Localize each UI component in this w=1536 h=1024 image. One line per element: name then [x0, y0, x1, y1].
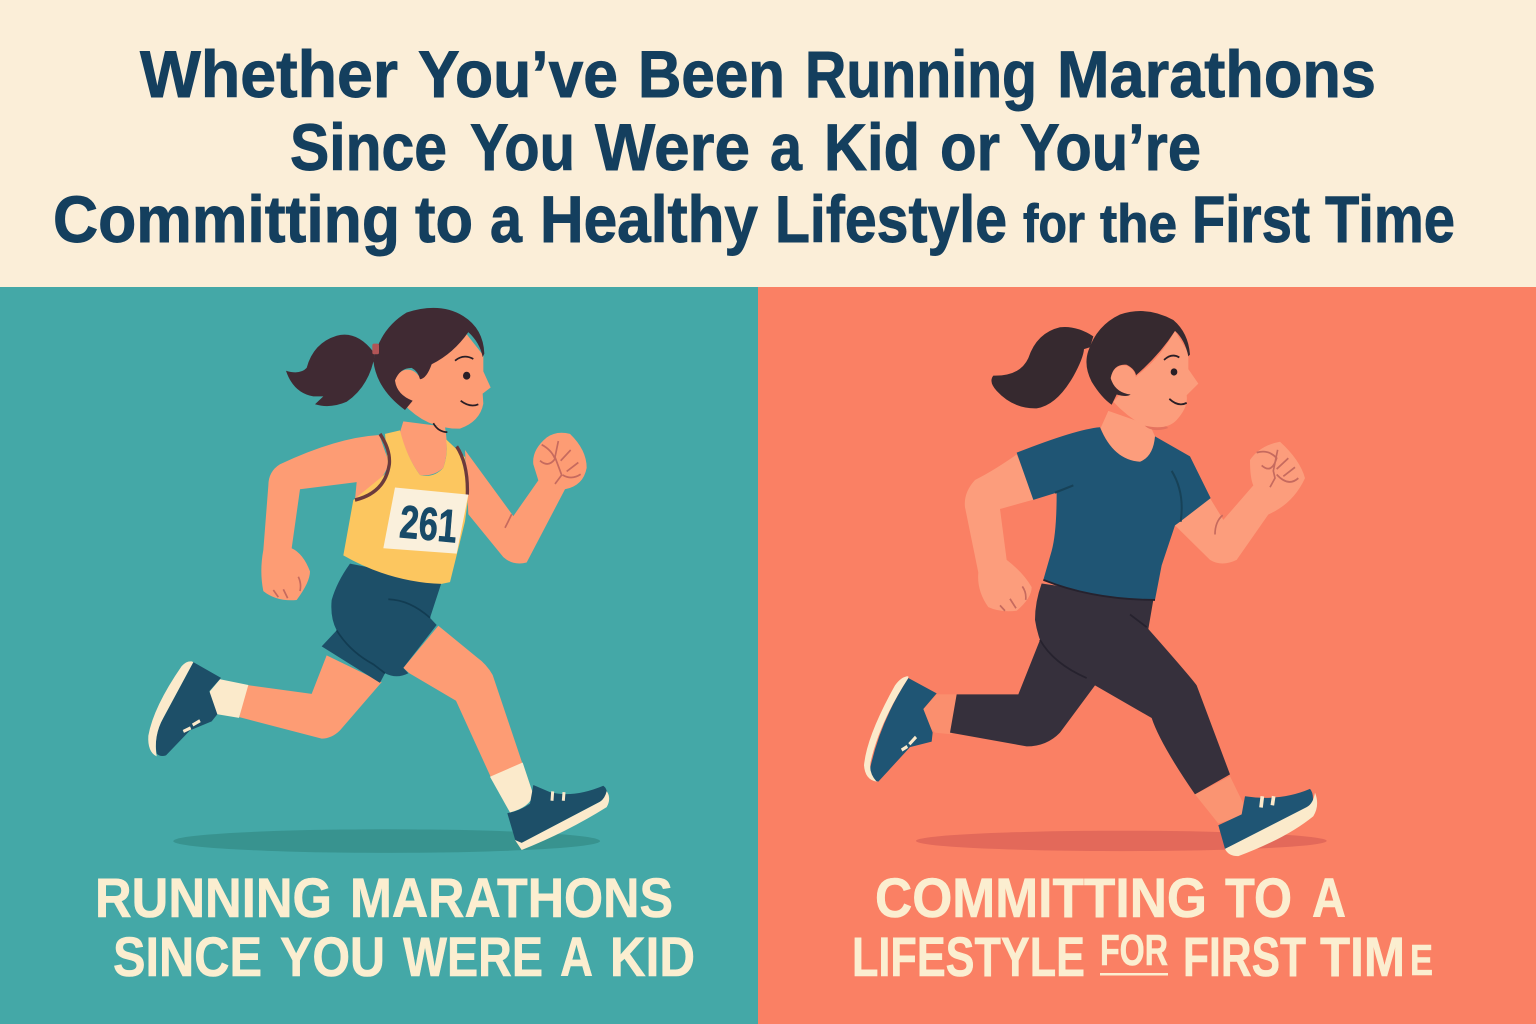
back leg: [239, 655, 382, 739]
front leg: [403, 626, 523, 777]
figure: young runner: [148, 308, 609, 853]
ground shadow: [916, 831, 1327, 851]
t-shirt: [1017, 427, 1211, 600]
label: committing to a lifestyle: FIRST: [1183, 925, 1306, 988]
tank top: [343, 430, 468, 584]
title: Whether: [140, 37, 398, 111]
title: Kid: [824, 110, 920, 184]
label: running marathons: YOU: [280, 925, 385, 988]
title: for: [1023, 194, 1085, 254]
title: Since: [290, 110, 447, 184]
front shin: [1195, 776, 1243, 823]
back arm: [965, 454, 1035, 611]
label: committing to a lifestyle: [852, 866, 1433, 988]
title: You’re: [1020, 110, 1201, 184]
title: You’ve: [418, 37, 618, 111]
front shoe: [1218, 789, 1317, 856]
title: to: [415, 182, 473, 256]
head: [372, 308, 491, 432]
header band: [0, 0, 1536, 287]
race bib: [383, 487, 468, 554]
front shoe: [507, 785, 609, 850]
figure: adult runner: [864, 311, 1327, 856]
title: Lifestyle: [775, 182, 1007, 256]
neck: [400, 421, 447, 475]
label: committing to a lifestyle: E: [1410, 936, 1433, 985]
race bib: 261: [398, 495, 459, 553]
label: committing to a lifestyle: TO: [1225, 866, 1292, 929]
label: committing to a lifestyle: FOR: [1100, 926, 1168, 975]
back shin: [923, 694, 957, 734]
leggings: [950, 584, 1230, 794]
ground shadow: [173, 829, 600, 853]
label: running marathons: [95, 866, 695, 988]
title: or: [940, 110, 1000, 184]
title: a: [490, 182, 523, 256]
title: You: [470, 110, 575, 184]
fist details: [273, 441, 581, 598]
title: Were: [595, 110, 750, 184]
title: a: [770, 110, 803, 184]
title: Been: [638, 37, 785, 111]
label: committing to a lifestyle: LIFESTYLE: [852, 925, 1085, 988]
title: the: [1100, 194, 1177, 254]
front arm: [465, 433, 587, 564]
label: committing to a lifestyle: TIM: [1320, 925, 1405, 988]
head: [1086, 311, 1198, 430]
fist details: [1000, 450, 1298, 611]
label: running marathons: MARATHONS: [350, 866, 673, 929]
back sock: [209, 679, 248, 718]
neck: [1101, 411, 1155, 462]
panel: running marathons since you were a kid: [0, 287, 758, 1024]
title: Committing: [53, 182, 400, 256]
label: running marathons: KID: [610, 925, 695, 988]
label: running marathons: A: [560, 925, 593, 988]
panel: committing to a lifestyle for the first time: [758, 287, 1536, 1024]
back arm: [261, 435, 388, 600]
label: running marathons: SINCE: [113, 925, 262, 988]
back shoe: [148, 661, 221, 756]
front sock: [490, 762, 533, 812]
ponytail: [991, 327, 1093, 408]
label: running marathons: RUNNING: [95, 866, 332, 929]
label: running marathons: WERE: [403, 925, 543, 988]
label: committing to a lifestyle: COMMITTING: [875, 866, 1207, 929]
label: committing to a lifestyle: A: [1312, 866, 1346, 929]
front arm: [1175, 442, 1305, 564]
title: Marathons: [1057, 37, 1376, 111]
title: Running: [805, 37, 1037, 111]
title: Healthy: [540, 182, 758, 256]
title: First: [1192, 182, 1310, 256]
armhole trim: [355, 434, 467, 500]
title: [53, 37, 1455, 256]
ponytail: [286, 335, 375, 406]
back shoe: [864, 676, 937, 782]
shorts: [322, 564, 442, 683]
title: Time: [1325, 182, 1455, 256]
